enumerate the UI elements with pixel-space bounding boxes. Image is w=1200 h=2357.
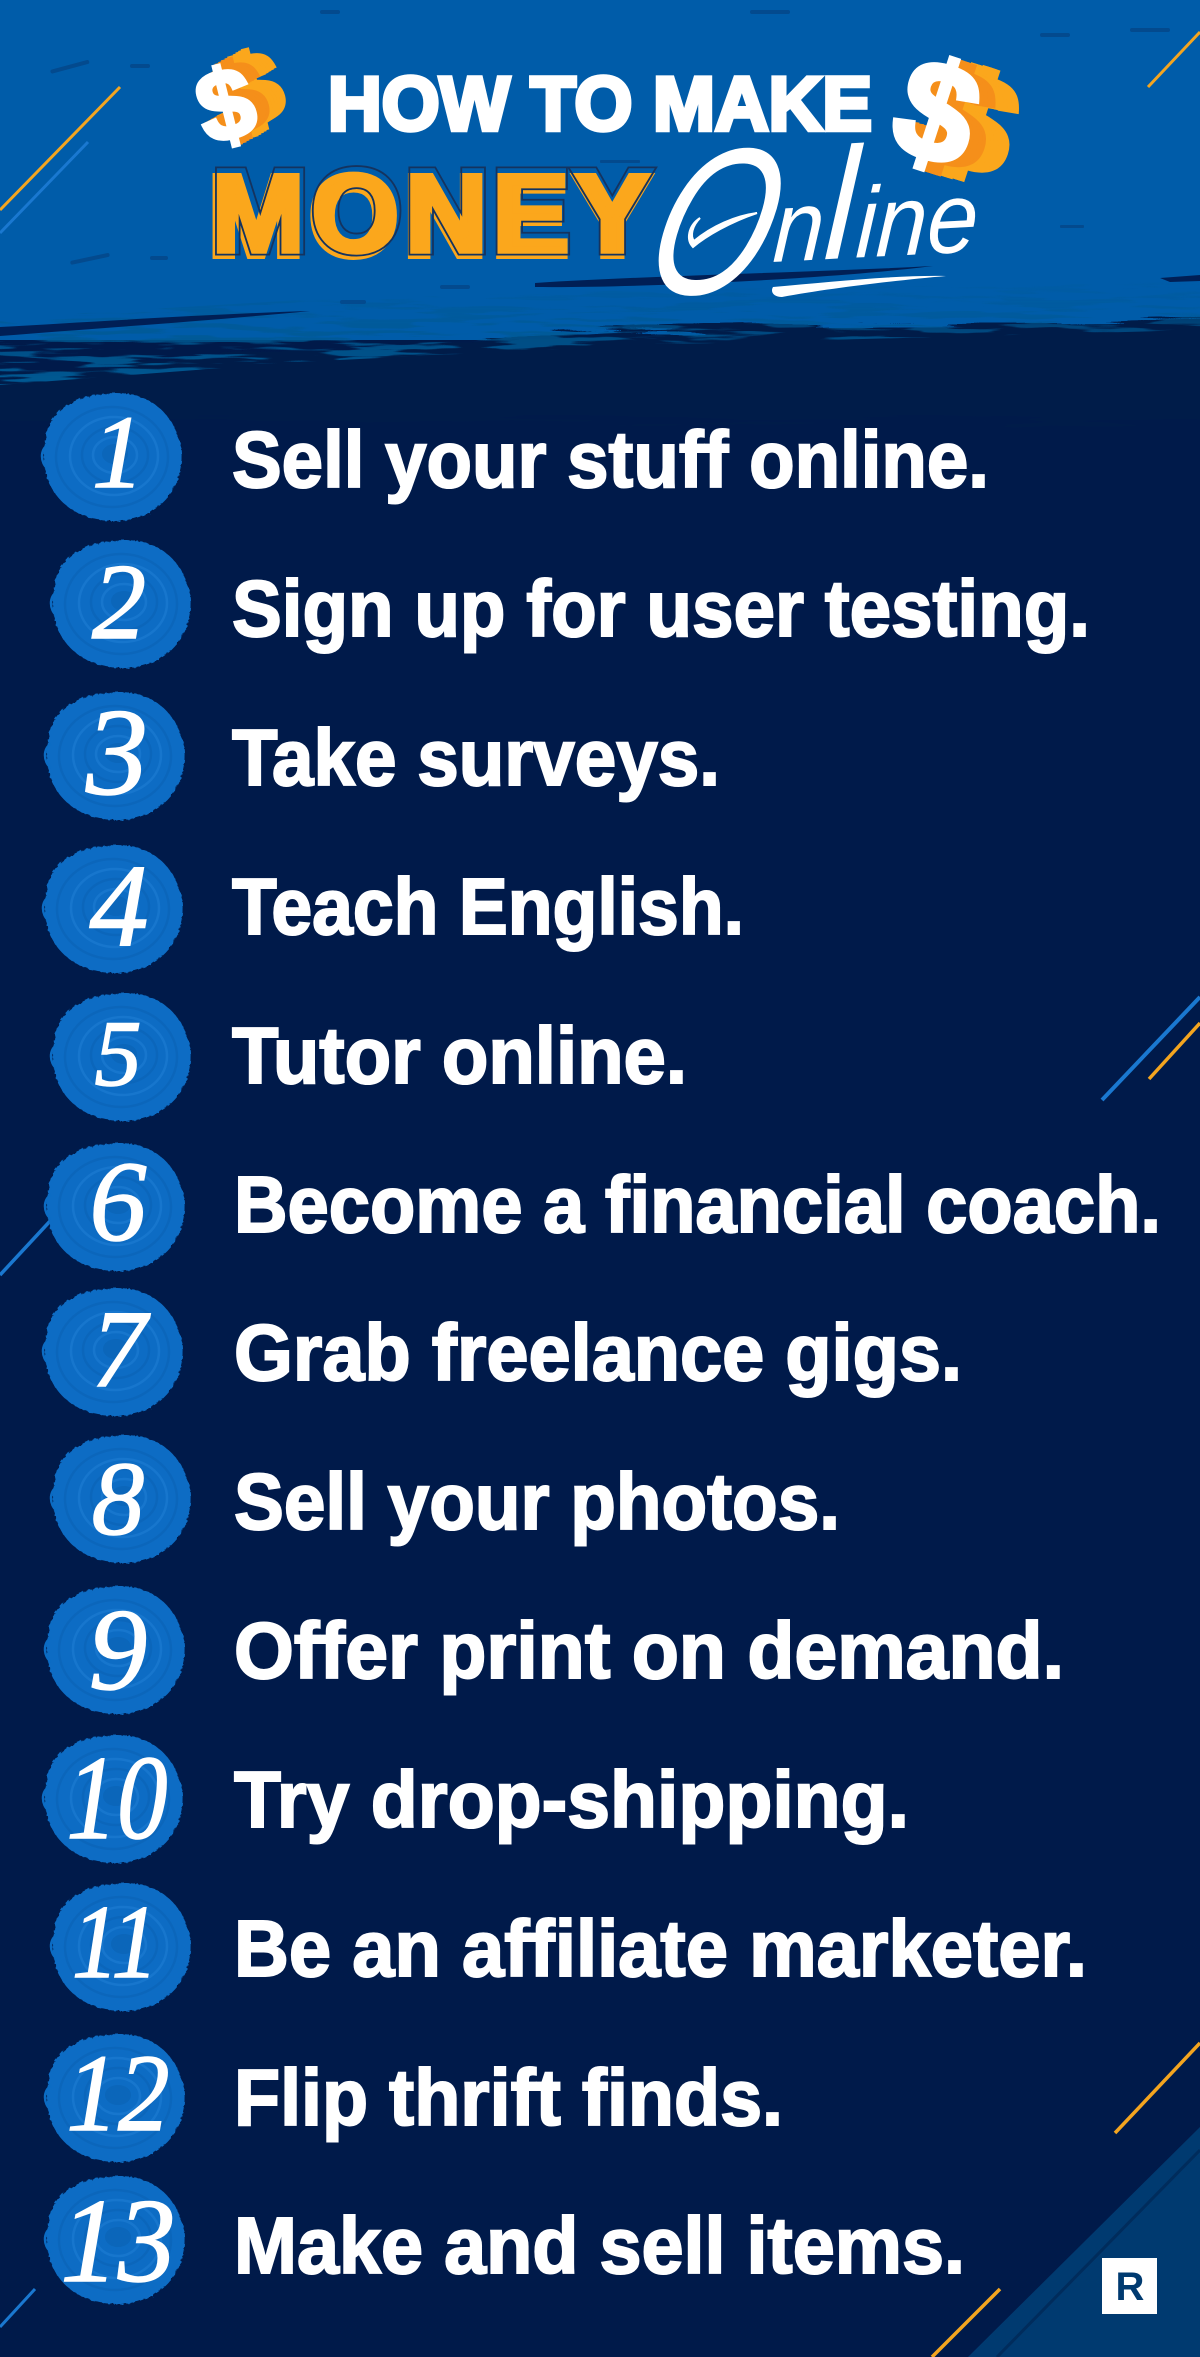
icon: left dollar sign: $ — [192, 41, 273, 163]
title word: money: MONEY — [209, 153, 650, 279]
title underline swoosh — [772, 276, 946, 297]
icon: left dollar sign: $ — [188, 43, 269, 165]
text: item 7: Grab freelance gigs. — [234, 1308, 962, 1397]
accent line: right bottom orange — [1115, 2043, 1200, 2133]
number badge 5: 5 — [94, 1002, 142, 1106]
icon: right dollar sign: $ — [901, 32, 1023, 206]
corner panel — [968, 2127, 1200, 2357]
number badge 6 — [45, 1138, 185, 1271]
text: item 11: Be an affiliate marketer. — [234, 1904, 1087, 1993]
number badge 12: 12 — [66, 2032, 170, 2154]
number badge 9 — [45, 1586, 185, 1715]
icon: right dollar sign: $ — [889, 30, 1012, 203]
accent line: right middle blue — [1102, 997, 1200, 1100]
icon: right dollar sign: $ — [909, 34, 1031, 207]
number badge 10: 10 — [66, 1731, 168, 1864]
list item 2 — [51, 540, 1090, 668]
text: item 8: Sell your photos. — [234, 1457, 840, 1546]
text: item 13: Make and sell items. — [234, 2201, 965, 2290]
list item 10 — [43, 1731, 909, 1864]
list item 9 — [45, 1586, 1064, 1715]
number badge 5 — [51, 993, 191, 1121]
list item 8 — [51, 1435, 840, 1563]
accent line: top left orange — [0, 87, 120, 210]
accent line: top left blue — [0, 142, 88, 233]
icon: right dollar sign: $ — [880, 27, 1003, 200]
number badge 7 — [43, 1288, 183, 1416]
number badge 1: 1 — [92, 395, 144, 510]
icon: left dollar sign: $ — [201, 35, 282, 157]
logo — [1102, 2258, 1157, 2314]
title — [212, 74, 976, 297]
accent line: left bottom blue — [0, 2289, 35, 2327]
number badge 6: 6 — [90, 1138, 146, 1265]
header brush panel — [0, 0, 1200, 420]
title word: online — [625, 102, 984, 341]
number badge 8: 8 — [92, 1440, 144, 1557]
list item 3 — [45, 684, 720, 821]
icon: right dollar sign: $ — [885, 28, 1008, 202]
number badge 3: 3 — [85, 684, 148, 821]
number badge 2 — [51, 540, 191, 668]
icon: left dollar sign — [183, 28, 297, 166]
text: item 3: Take surveys. — [232, 713, 720, 802]
number badge 1 — [42, 393, 182, 521]
title line: how to make: HOW TO MAKE — [328, 62, 872, 147]
logo: R — [1116, 2265, 1145, 2309]
number badge 4: 4 — [90, 840, 148, 971]
list item 7 — [43, 1288, 962, 1416]
icon: left dollar sign: $ — [203, 35, 284, 157]
number badge 4 — [43, 840, 183, 973]
number badge 11: 11 — [72, 1883, 158, 2000]
number badge 8 — [51, 1435, 191, 1563]
accent line: left middle blue — [0, 1219, 52, 1275]
title word: online: nline — [770, 108, 984, 296]
icon: right dollar sign: $ — [912, 35, 1035, 208]
title word: online: O — [625, 102, 810, 341]
list item 1 — [42, 393, 989, 521]
text: item 9: Offer print on demand. — [234, 1606, 1064, 1695]
text: item 1: Sell your stuff online. — [232, 415, 989, 504]
icon: left dollar sign: $ — [211, 29, 292, 152]
icon: right dollar sign: $ — [897, 31, 1020, 204]
icon: right dollar sign: $ — [893, 31, 1015, 204]
icon: left dollar sign: $ — [194, 39, 275, 161]
text: item 5: Tutor online. — [232, 1011, 687, 1100]
list item 6 — [45, 1138, 1161, 1271]
number badge 2: 2 — [92, 543, 146, 662]
text: item 12: Flip thrift finds. — [234, 2053, 783, 2142]
number badge 9: 9 — [89, 1586, 147, 1715]
list item 5 — [51, 993, 687, 1121]
icon: left dollar sign: $ — [214, 28, 295, 150]
accent line: top right orange — [1148, 32, 1200, 87]
number badge 13: 13 — [60, 2174, 176, 2307]
icon: left dollar sign: $ — [198, 37, 279, 159]
icon: left dollar sign: $ — [206, 33, 287, 155]
number badge 7: 7 — [92, 1288, 150, 1410]
text: item 2: Sign up for user testing. — [232, 564, 1090, 653]
icon: right dollar sign: $ — [905, 34, 1027, 207]
icon: left dollar sign: $ — [209, 31, 290, 153]
icon: right dollar sign: $ — [876, 25, 998, 199]
list item 13 — [45, 2174, 965, 2307]
list item 11 — [51, 1883, 1087, 2011]
text: item 4: Teach English. — [232, 862, 744, 951]
accent line: right middle orange — [1149, 1023, 1200, 1079]
number badge 11 — [51, 1883, 191, 2011]
icon: right dollar sign: $ — [916, 36, 1039, 210]
list item 4 — [43, 840, 744, 973]
icon: left dollar sign: $ — [185, 44, 266, 166]
text: item 10: Try drop-shipping. — [234, 1755, 909, 1844]
icon: right dollar sign — [876, 23, 1039, 212]
accent line: bottom orange — [932, 2289, 1000, 2357]
number badge 3 — [45, 684, 185, 821]
list item 12 — [45, 2032, 783, 2162]
